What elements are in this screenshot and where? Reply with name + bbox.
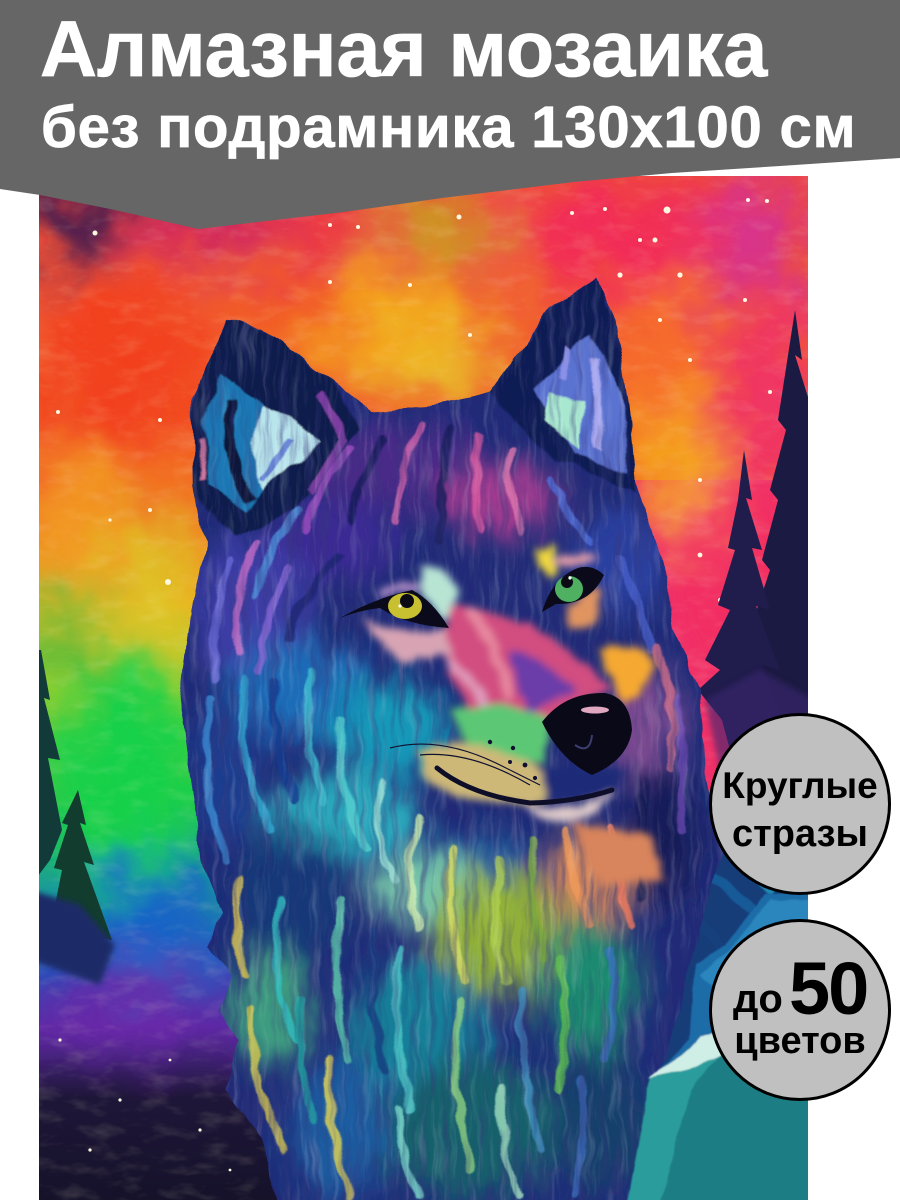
subtitle: без подрамника 130х100 см xyxy=(41,95,856,160)
stars xyxy=(56,198,772,1171)
painting: wolf and aurora xyxy=(39,176,808,1200)
left ear xyxy=(190,319,360,535)
header band xyxy=(0,0,900,229)
badge: round rhinestones: Круглые xyxy=(722,765,878,806)
whiskers xyxy=(390,740,540,785)
fur strokes xyxy=(207,425,684,1195)
snow rock xyxy=(626,893,808,1200)
blue ground behind neck xyxy=(661,852,784,1068)
badge: up to 50 colours xyxy=(709,919,891,1101)
fur texture xyxy=(170,270,740,1200)
muzzle shading xyxy=(364,545,665,885)
badge: up to 50 colours: до xyxy=(733,977,783,1021)
badge: round rhinestones: стразы xyxy=(732,813,868,855)
eye: left xyxy=(340,590,449,628)
badge: up to 50 colours: цветов xyxy=(734,1020,866,1062)
pine trees left xyxy=(30,650,115,985)
mouth xyxy=(437,768,612,803)
wolf head xyxy=(170,270,740,1200)
aurora background xyxy=(15,176,820,1200)
title: Алмазная мозаика xyxy=(40,4,767,93)
nose xyxy=(542,693,632,775)
eye: right xyxy=(542,567,604,612)
pine trees right xyxy=(700,310,808,768)
badge: round rhinestones xyxy=(709,713,891,895)
right ear xyxy=(490,279,638,495)
wolf face xyxy=(340,545,665,885)
badge: up to 50 colours: 50 xyxy=(789,947,867,1030)
